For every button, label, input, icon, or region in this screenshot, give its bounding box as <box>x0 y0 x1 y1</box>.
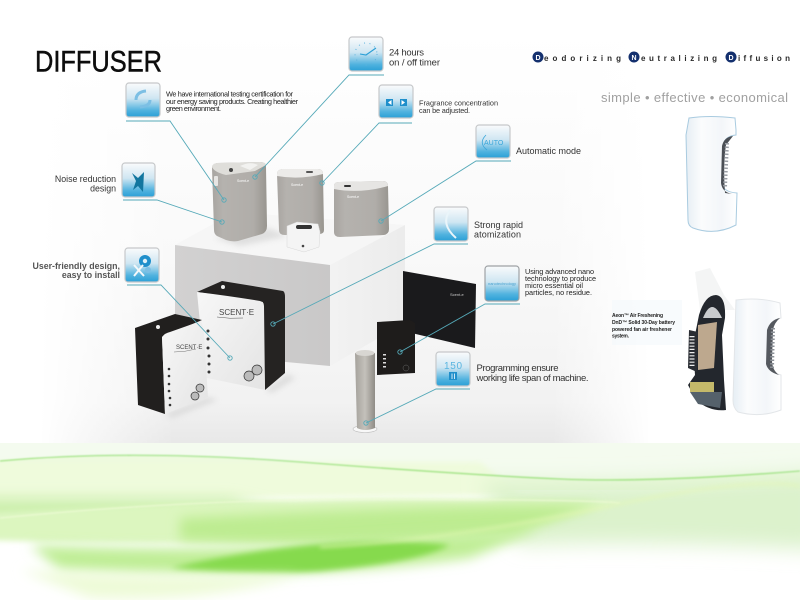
title: DIFFUSER <box>35 46 162 78</box>
product: large black and white wall unit: SCENT·E <box>219 308 254 317</box>
icon: speaker cross <box>122 163 155 197</box>
caption: aeon air freshening: powered fan air freshener <box>612 327 672 333</box>
icon: left and right arrows <box>379 85 413 118</box>
user friendly text: easy to install <box>62 270 120 280</box>
nano text: technology to produce <box>525 274 596 283</box>
tagline: deodorizing neutralizing diffusion: iffusion <box>738 54 790 63</box>
icon: recycle arrows <box>126 83 160 117</box>
product: air freshener front view <box>686 116 737 231</box>
icon: 150 display: 150 <box>444 361 462 372</box>
icon: gear and tools <box>125 248 159 282</box>
product: mini white diffuser <box>287 222 320 252</box>
product: small black panel unit <box>377 320 415 375</box>
nano text: micro essential oil <box>525 281 583 290</box>
subtitle: simple effective economical: simple • effective • economical <box>601 90 788 105</box>
user friendly text: User-friendly design, <box>32 261 120 271</box>
icon: auto <box>476 125 510 158</box>
timer text: on / off timer <box>389 58 440 68</box>
caption ghost panel <box>612 300 682 345</box>
product: large black and white wall unit <box>197 281 285 390</box>
product: slim black wall unit: Scent-e <box>450 292 465 297</box>
product: air freshener cutaway <box>688 268 735 410</box>
atomization text: atomization <box>474 230 521 240</box>
callout: certification <box>126 83 299 202</box>
fragrance text: can be adjusted. <box>419 106 470 115</box>
callout: automatic mode <box>379 125 581 223</box>
callout: nano technology <box>398 266 596 354</box>
callout: noise reduction <box>55 163 224 224</box>
callout: fragrance <box>320 85 498 185</box>
product: small silver diffuser <box>334 181 389 237</box>
product: small silver diffuser: Scent-e <box>347 195 359 199</box>
certification text: our energy saving products. Creating healthier <box>166 97 299 106</box>
tagline: deodorizing neutralizing diffusion: eodorizing <box>544 54 621 63</box>
product: small black and white wall unit: SCENT·E <box>176 345 202 351</box>
product: tube diffuser <box>353 350 377 432</box>
tagline: deodorizing neutralizing diffusion: eutralizing <box>641 54 717 63</box>
callout: timer <box>253 37 440 179</box>
timer text: 24 hours <box>389 48 424 58</box>
noise reduction text: Noise reduction <box>55 174 116 184</box>
fragrance text: Fragrance concentration <box>419 98 498 108</box>
icon: nano <box>485 266 519 301</box>
certification text: green environment. <box>166 104 221 113</box>
certification text: We have international testing certification for <box>166 90 294 98</box>
caption: aeon air freshening: DnD™ Solid 30-Day battery <box>612 320 675 326</box>
photo backdrop <box>40 32 650 443</box>
icon: nano: nanotechnology <box>488 281 516 286</box>
callout: user friendly <box>32 248 232 360</box>
caption: aeon air freshening: system. <box>612 334 630 340</box>
product: large silver diffuser: Scent-e <box>237 179 249 183</box>
icon: clock <box>349 37 383 71</box>
product: medium silver diffuser <box>277 169 324 235</box>
nano text: Using advanced nano <box>525 267 594 276</box>
product: small black and white wall unit <box>135 314 208 414</box>
product: medium silver diffuser: Scent-e <box>291 183 303 187</box>
tagline: deodorizing neutralizing diffusion: D <box>728 55 734 62</box>
automatic mode text: Automatic mode <box>516 146 581 156</box>
callout: atomization <box>271 207 523 326</box>
icon: 150 display <box>436 352 470 386</box>
tagline: deodorizing neutralizing diffusion: N <box>632 55 637 62</box>
product: slim black wall unit <box>403 271 476 348</box>
nano text: particles, no residue. <box>525 288 592 297</box>
noise reduction text: design <box>90 184 116 194</box>
product shadows <box>165 228 296 418</box>
product: large silver diffuser <box>212 162 267 241</box>
tagline: deodorizing neutralizing diffusion: D <box>536 55 541 62</box>
atomization text: Strong rapid <box>474 220 523 230</box>
caption: aeon air freshening: Aeon™ Air Freshening <box>612 313 663 319</box>
product: air freshener side view <box>733 299 781 415</box>
pedestal <box>175 212 405 366</box>
callout: programming <box>364 352 588 425</box>
icon: auto: AUTO <box>484 140 504 147</box>
icon: mist <box>434 207 468 241</box>
programming text: working life span of machine. <box>476 373 588 384</box>
bottom green wave background <box>0 443 800 600</box>
programming text: Programming ensure <box>476 363 558 374</box>
tagline: deodorizing neutralizing diffusion <box>532 52 790 63</box>
